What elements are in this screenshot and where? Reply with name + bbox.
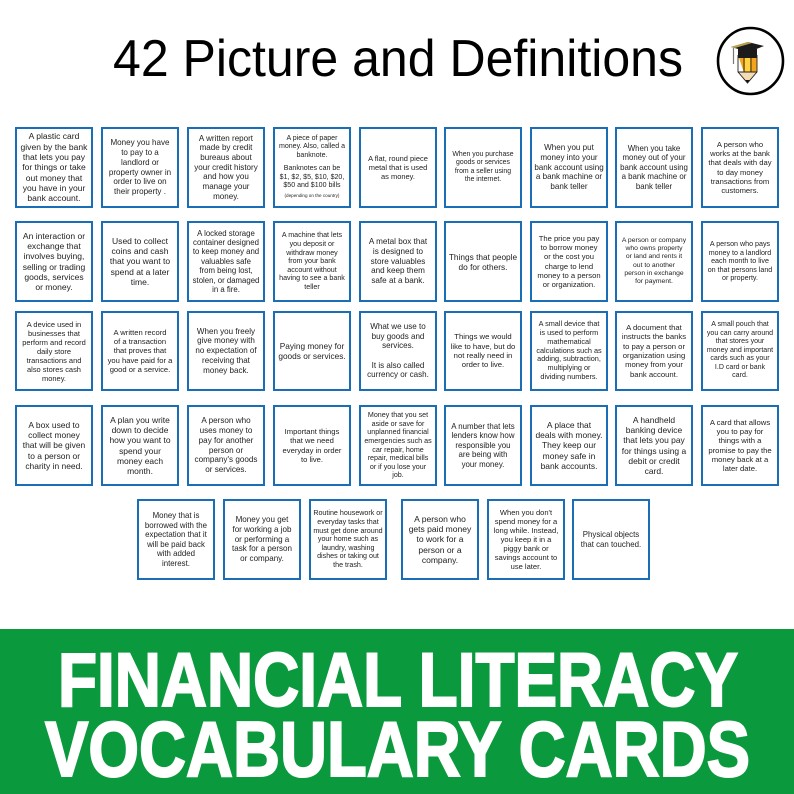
- card 9: customers.: [721, 186, 759, 195]
- card 12: in a fire.: [212, 285, 240, 294]
- card 26: [615, 311, 693, 391]
- card 35: banking device: [626, 425, 682, 435]
- card 37: Money that is: [153, 511, 199, 520]
- card 30: [187, 405, 265, 486]
- card 29: A plan you write: [110, 415, 170, 425]
- card 19: also stores cash: [27, 364, 81, 374]
- card 13: having to see a bank: [279, 274, 345, 282]
- card 4: [273, 127, 351, 208]
- card 20: A written record: [114, 328, 166, 337]
- card 7: money into your: [540, 153, 598, 162]
- card 31: Important things: [285, 427, 339, 436]
- card 41: you keep it in a: [501, 535, 551, 544]
- card 11: spend at a later: [111, 267, 169, 277]
- card 23: It is also called: [372, 361, 424, 370]
- card 3: manage your: [202, 182, 249, 191]
- card 12: valuables safe: [201, 257, 251, 266]
- card 12: to keep money and: [193, 247, 259, 256]
- card 22: [273, 311, 351, 391]
- card 13: teller: [304, 283, 320, 291]
- card 19: transactions and: [27, 356, 81, 364]
- card 20: good or a service.: [110, 365, 170, 374]
- card 4: $1, $2, $5, $10, $20,: [280, 174, 344, 181]
- card 40: gets paid money: [409, 524, 471, 534]
- card 35: debit or credit: [628, 456, 680, 466]
- card 33: your money.: [462, 460, 504, 469]
- card 35: [615, 405, 693, 486]
- card 19: [15, 311, 93, 391]
- card 32: aside or save for: [372, 420, 424, 428]
- card 3: your credit history: [194, 163, 258, 172]
- card 17: [615, 221, 693, 302]
- card 41: long while. Instead,: [494, 526, 558, 535]
- card 10: An interaction or: [23, 231, 85, 241]
- card 34: bank accounts.: [541, 461, 597, 471]
- card 14: and keep them: [371, 266, 425, 275]
- card 26: money from your: [625, 360, 683, 369]
- card 41: When you don't: [500, 508, 552, 517]
- card 36: later date.: [723, 464, 757, 473]
- card 28: collect money: [28, 430, 80, 440]
- card 18: money to a landlord: [709, 249, 771, 257]
- card 6: the internet.: [465, 176, 501, 183]
- card 9: transactions from: [711, 177, 769, 186]
- card 34: A place that: [547, 420, 591, 430]
- card 39: [309, 499, 387, 580]
- card 9: [701, 127, 779, 208]
- title: 42 Picture and Definitions: [113, 30, 683, 88]
- card 1: for things or take: [22, 162, 86, 172]
- card 27: cards such as your: [710, 355, 770, 362]
- card 40: A person who: [414, 514, 466, 524]
- card 35: for things using a: [622, 446, 686, 456]
- card 30: or services.: [205, 465, 247, 474]
- card 11: that you want to: [110, 256, 170, 266]
- card 23: What we use to: [370, 322, 426, 331]
- card 23: services.: [382, 341, 414, 350]
- card 9: A person who: [717, 140, 763, 149]
- card 42: that can touched.: [581, 540, 641, 548]
- card 27: money and important: [707, 347, 773, 354]
- card 25: dividing numbers.: [540, 372, 598, 381]
- card 4: $50 and $100 bills: [283, 182, 341, 189]
- card 41: spend money for a: [495, 517, 557, 526]
- card 14: store valuables: [371, 257, 425, 266]
- card 34: [530, 405, 608, 486]
- card 31: [273, 405, 351, 486]
- card 37: borrowed with the: [145, 520, 207, 530]
- card 28: charity in need.: [25, 461, 83, 471]
- card 26: bank account.: [630, 370, 678, 379]
- card 29: spend your: [119, 446, 161, 456]
- card 37: interest.: [162, 558, 190, 568]
- card 40: [401, 499, 479, 580]
- card 21: no expectation of: [195, 346, 257, 355]
- card 13: withdraw money: [286, 249, 338, 257]
- card 29: money each: [117, 456, 163, 466]
- card 1: [15, 127, 93, 208]
- card 2: to pay to a: [121, 148, 159, 157]
- card 16: money to a person: [537, 271, 601, 280]
- card 28: to a person or: [28, 451, 80, 461]
- card 21: money back.: [203, 366, 249, 375]
- card 17: out to another: [633, 262, 675, 268]
- card 29: [101, 405, 179, 486]
- card 31: to live.: [301, 455, 323, 464]
- card 21: receiving that: [202, 356, 250, 365]
- card 4: money. Also, called a: [279, 143, 345, 150]
- card 5: A flat, round piece: [368, 154, 428, 163]
- icon: graduation pencil logo: [716, 26, 784, 96]
- card 1: you have in your: [23, 183, 85, 193]
- card 15: [444, 221, 522, 302]
- card 19: A device used in: [27, 320, 81, 328]
- card 11: coins and cash: [112, 246, 168, 256]
- card 39: the trash.: [333, 561, 363, 569]
- card 10: exchange that: [27, 241, 81, 251]
- card 36: promise to pay the: [708, 446, 772, 454]
- card 36: money back at a: [712, 455, 768, 464]
- card 20: [101, 311, 179, 391]
- card 13: A machine that lets: [282, 231, 342, 239]
- card 3: money.: [213, 192, 239, 201]
- card 33: are being with: [458, 450, 508, 459]
- card 22: goods or services.: [278, 351, 346, 361]
- card 8: a bank machine or: [622, 172, 686, 181]
- card 7: When you put: [544, 143, 594, 152]
- card 12: A locked storage: [197, 229, 255, 238]
- card 29: month.: [127, 466, 153, 476]
- card 6: When you purchase: [452, 151, 514, 158]
- card 39: must get done around: [313, 527, 383, 535]
- card 23: currency or cash.: [367, 370, 429, 379]
- card 16: or organization.: [543, 280, 595, 289]
- card 31: that we need: [290, 436, 334, 445]
- card 11: Used to collect: [112, 236, 168, 246]
- card 24: Things we would: [454, 332, 512, 341]
- card 30: company's goods: [194, 455, 257, 464]
- card 18: [701, 221, 779, 302]
- card 13: [273, 221, 351, 302]
- card 23: [359, 311, 437, 391]
- card 30: pay for another: [199, 436, 253, 445]
- card 13: you deposit or: [290, 240, 334, 248]
- card 42: Physical objects: [583, 530, 639, 539]
- card 35: that lets you pay: [623, 435, 685, 445]
- card 29: down to decide: [112, 425, 168, 435]
- card 17: or land and rents it: [626, 253, 682, 260]
- card 4: (depending on the country): [285, 193, 339, 198]
- card 6: from a seller using: [455, 168, 511, 174]
- card 29: how you want to: [109, 435, 171, 445]
- card 1: given by the bank: [21, 142, 87, 152]
- card 32: job.: [392, 471, 404, 479]
- card 21: When you freely: [197, 327, 255, 336]
- card 3: bureaus about: [200, 153, 252, 162]
- card 16: or the cost you: [544, 252, 594, 261]
- card 32: [359, 405, 437, 486]
- card 14: safe at a bank.: [371, 276, 425, 285]
- card 14: is designed to: [373, 247, 423, 256]
- card 18: on that persons land: [708, 266, 772, 274]
- card 17: who owns property: [625, 245, 683, 252]
- card 2: landlord or: [121, 158, 159, 167]
- card 38: [223, 499, 301, 580]
- card 25: mathematical: [547, 337, 591, 346]
- card 12: container designed: [193, 238, 259, 247]
- card 17: person in exchange: [624, 270, 684, 277]
- card 14: [359, 221, 437, 302]
- card 30: person or: [209, 446, 243, 454]
- card 11: time.: [131, 277, 149, 287]
- card 35: card.: [645, 466, 663, 476]
- card 27: A small pouch that: [711, 321, 769, 328]
- card 31: everyday in order: [283, 446, 341, 454]
- card 37: [137, 499, 215, 580]
- card 35: A handheld: [633, 415, 675, 425]
- card 21: give money with: [197, 336, 255, 345]
- card 20: of a transaction: [114, 337, 166, 346]
- card 12: from being lost,: [199, 266, 253, 275]
- card 37: expectation that it: [145, 530, 207, 539]
- card 10: involves buying,: [24, 251, 84, 261]
- card 8: money out of your: [622, 153, 686, 162]
- card 2: property owner in: [109, 168, 171, 176]
- card 17: for payment.: [635, 278, 673, 285]
- card 39: Routine housework or: [313, 509, 383, 517]
- card 5: as money.: [381, 172, 415, 181]
- card 41: piggy bank or: [503, 544, 549, 553]
- card 1: out money that: [26, 173, 82, 183]
- card 24: like to have, but do: [451, 342, 515, 351]
- card 25: multiplying or: [548, 363, 590, 372]
- card 12: [187, 221, 265, 302]
- card 4: Banknotes can be: [284, 165, 340, 172]
- card 19: perform and record: [22, 338, 86, 346]
- card 25: calculations such as: [536, 346, 602, 355]
- card 7: bank teller: [550, 182, 588, 191]
- card 33: [444, 405, 522, 486]
- card 13: from your bank: [288, 257, 336, 265]
- card 2: Money you have: [110, 138, 170, 147]
- card 23: buy goods and: [372, 332, 424, 341]
- card 8: bank teller: [636, 182, 672, 191]
- card 19: businesses that: [28, 328, 80, 338]
- card 7: a bank machine or: [536, 172, 602, 181]
- card 33: responsible you: [455, 441, 511, 450]
- card 38: or performing a: [235, 535, 289, 544]
- card 32: unplanned financial: [367, 428, 429, 436]
- card 2: their property .: [114, 187, 166, 196]
- card 33: lenders know how: [451, 431, 515, 440]
- card 11: [101, 221, 179, 302]
- card 38: for working a job: [232, 525, 292, 534]
- card 9: to day money: [717, 168, 763, 176]
- card 19: daily store: [37, 346, 71, 356]
- card 18: each month to live: [711, 257, 769, 265]
- card 39: dishes or taking out: [317, 552, 379, 560]
- card 5: metal that is used: [369, 163, 427, 172]
- card 27: you can carry around: [707, 330, 773, 337]
- card 13: account without: [287, 266, 337, 274]
- card 27: I.D card or bank: [715, 364, 765, 371]
- card 9: works at the bank: [710, 149, 770, 158]
- card 39: everyday tasks that: [317, 518, 379, 526]
- card 27: [701, 311, 779, 391]
- card 26: to pay a person or: [623, 342, 685, 351]
- card 28: [15, 405, 93, 486]
- card 7: bank account using: [534, 163, 604, 172]
- card 30: A person who: [201, 416, 251, 425]
- card 17: A person or company: [622, 237, 686, 244]
- card 1: bank account.: [27, 193, 81, 203]
- card 19: money.: [42, 374, 66, 382]
- card 10: selling or trading: [23, 262, 85, 272]
- card 4: A piece of paper: [287, 135, 337, 142]
- card 2: order to live on: [113, 177, 167, 186]
- card 7: [530, 127, 608, 208]
- card 36: [701, 405, 779, 486]
- card 10: [15, 221, 93, 302]
- card 2: [101, 127, 179, 208]
- card 16: The price you pay: [539, 234, 599, 243]
- card 3: A written report: [199, 134, 253, 143]
- card 24: not really need in: [454, 351, 512, 360]
- card 18: or property.: [722, 274, 758, 282]
- card 20: that proves that: [114, 346, 166, 355]
- card 1: A plastic card: [29, 131, 79, 141]
- card 24: order to live.: [462, 360, 504, 369]
- card 21: [187, 311, 265, 391]
- card 25: is used to perform: [540, 328, 598, 337]
- banner heading: [44, 638, 750, 793]
- card 26: A document that: [626, 323, 682, 332]
- card 30: uses money to: [200, 426, 252, 435]
- card 41: [487, 499, 565, 580]
- card 25: adding, subtraction,: [537, 354, 601, 363]
- card 15: Things that people: [449, 252, 517, 262]
- card 37: will be paid back: [147, 540, 205, 548]
- card 28: A box used to: [28, 420, 80, 430]
- card 25: A small device that: [539, 319, 599, 328]
- card 5: [359, 127, 437, 208]
- card 41: savings account to: [495, 553, 557, 562]
- card 38: or company.: [240, 554, 284, 563]
- card 32: or if you lose your: [370, 463, 426, 471]
- card 37: with added: [157, 549, 195, 558]
- card 38: task for a person: [232, 544, 292, 553]
- card 40: to work for a: [417, 534, 463, 544]
- card 28: that will be given: [23, 440, 85, 450]
- card 6: [444, 127, 522, 208]
- card 10: goods, services: [24, 272, 84, 282]
- card 36: you to pay for: [717, 427, 763, 436]
- card 8: When you take: [628, 144, 680, 153]
- card 3: [187, 127, 265, 208]
- card 36: things with a: [719, 436, 761, 445]
- card 16: to borrow money: [541, 243, 597, 252]
- card 6: goods or services: [456, 159, 510, 166]
- card 36: A card that allows: [710, 418, 770, 427]
- card 39: laundry, washing: [322, 544, 374, 552]
- card 42: [572, 499, 650, 580]
- panel: green banner: [0, 629, 794, 794]
- card 16: [530, 221, 608, 302]
- card 40: company.: [422, 555, 458, 565]
- card 3: and how you: [203, 172, 249, 181]
- card 12: stolen, or damaged: [193, 276, 259, 285]
- card 40: person or a: [418, 545, 462, 555]
- card 39: your home such as: [318, 535, 378, 543]
- card 34: money safe in: [543, 451, 595, 461]
- card 26: instructs the banks: [622, 332, 686, 341]
- card 34: They keep our: [542, 440, 596, 450]
- card 27: that stores your: [716, 338, 764, 345]
- card 9: that deals with day: [708, 158, 772, 167]
- card 16: charge to lend: [545, 262, 593, 270]
- card 34: deals with money.: [535, 430, 603, 440]
- card 3: made by credit: [200, 143, 252, 152]
- card 20: you have paid for a: [108, 356, 172, 365]
- card 32: emergencies such as: [364, 437, 432, 445]
- card 18: A person who pays: [710, 240, 770, 248]
- card 25: [530, 311, 608, 391]
- card 8: [615, 127, 693, 208]
- card 8: bank account using: [620, 163, 688, 172]
- card 41: use later.: [511, 562, 541, 571]
- card 15: do for others.: [459, 262, 507, 272]
- card 38: Money you get: [236, 515, 288, 524]
- card 22: Paying money for: [280, 341, 344, 351]
- card 14: A metal box that: [369, 237, 427, 246]
- card 26: organization using: [623, 351, 685, 360]
- card 24: [444, 311, 522, 391]
- card 1: that lets you pay: [23, 152, 85, 162]
- card 4: banknote.: [296, 152, 327, 159]
- card 32: Money that you set: [368, 411, 428, 419]
- card 32: repair, medical bills: [368, 454, 428, 462]
- card 27: card.: [732, 372, 748, 379]
- card 33: A number that lets: [451, 422, 515, 431]
- card 32: car repair, home: [372, 446, 424, 454]
- card 10: or money.: [35, 282, 73, 292]
